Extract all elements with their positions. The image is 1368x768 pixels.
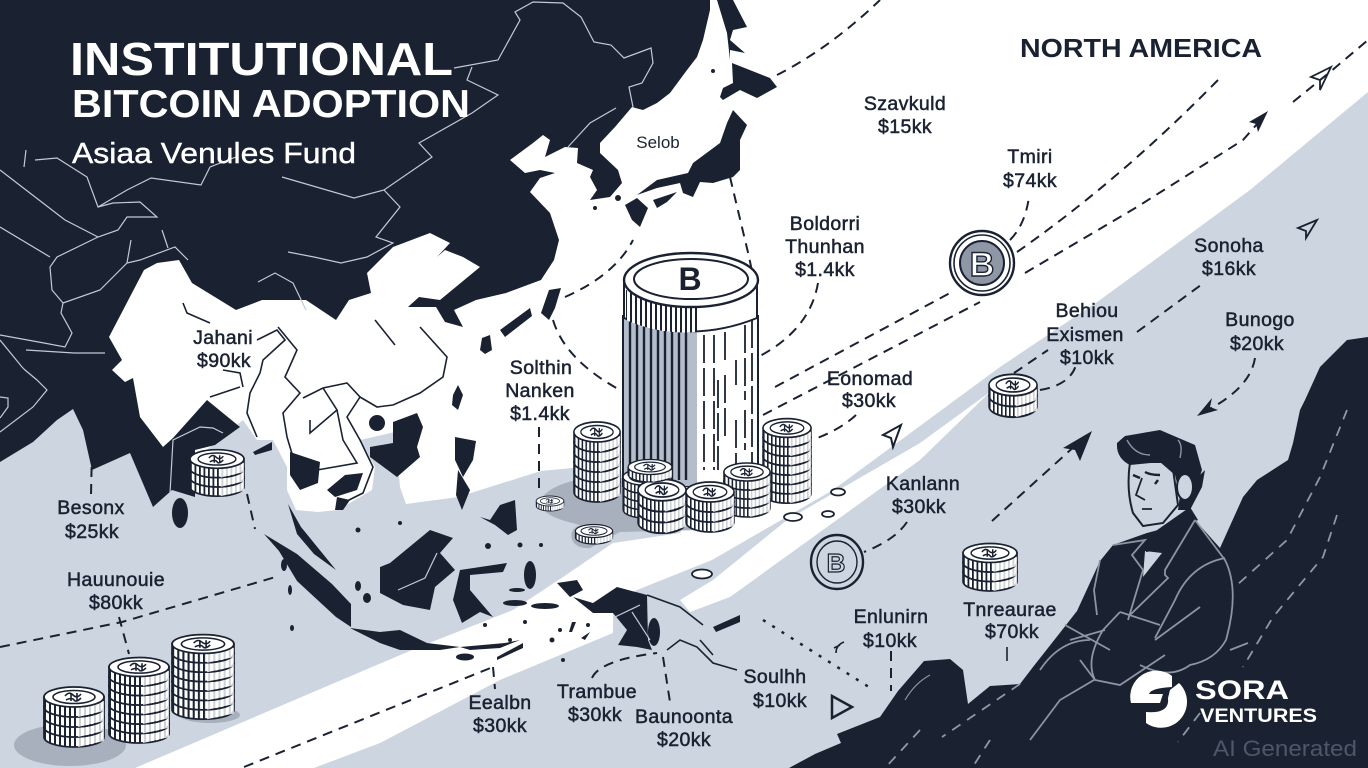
map: Southeast Asia dark lines bbox=[183, 303, 447, 503]
label: Boldorri Thunhan: Thunhan bbox=[785, 236, 865, 258]
column lid: B bbox=[678, 261, 702, 297]
label: Kanlann: $30kk bbox=[892, 496, 946, 518]
label: Jahani: $90kk bbox=[197, 350, 251, 372]
label: Bunogo: Bunogo bbox=[1225, 309, 1295, 331]
logo: Sora Ventures bbox=[1130, 671, 1317, 728]
white shipping band bbox=[680, 392, 990, 612]
label: Eonomad: Eonomad bbox=[827, 368, 913, 390]
neck and collar bbox=[1147, 507, 1198, 545]
label: Enlunirn: Enlunirn bbox=[854, 606, 928, 628]
label: Behiou Exismen: $10kk bbox=[1060, 347, 1114, 369]
label: Tnreaurae bbox=[963, 599, 1057, 643]
label: Behiou Exismen: Exismen bbox=[1046, 324, 1124, 346]
label: Eonomad bbox=[827, 368, 913, 412]
label: Behiou Exismen bbox=[1046, 300, 1124, 369]
logo: Sora Ventures: VENTURES bbox=[1200, 706, 1317, 727]
label: Jahani bbox=[193, 327, 253, 372]
loose coins bbox=[692, 488, 845, 578]
label: Eealbn: Eealbn bbox=[468, 692, 532, 714]
logo wordmark: SORA bbox=[1195, 675, 1289, 705]
label: Eonomad: $30kk bbox=[842, 390, 896, 412]
label: Sonoha: $16kk bbox=[1202, 258, 1256, 280]
label: Soulhh bbox=[743, 666, 807, 712]
face bbox=[1129, 462, 1178, 526]
map: Southeast Asia islands bbox=[172, 385, 740, 662]
map: country borders bbox=[0, 2, 653, 493]
coin stacks beside column bbox=[536, 419, 811, 544]
map: Japan and Sakhalin bbox=[480, 0, 777, 354]
label: Besonx bbox=[57, 497, 125, 543]
label: Boldorri Thunhan bbox=[785, 213, 865, 281]
coin stacks: bottom left bbox=[14, 635, 240, 766]
label: Bunogo bbox=[1225, 309, 1295, 355]
column lid bbox=[624, 253, 758, 332]
label: Trambue bbox=[557, 681, 637, 726]
seated figure and dark hillside bbox=[789, 337, 1368, 768]
label: Selob: Selob bbox=[636, 133, 680, 152]
label: Enlunirn: $10kk bbox=[863, 630, 917, 652]
label: Bunogo: $20kk bbox=[1230, 333, 1284, 355]
hair and ear detail bbox=[1117, 430, 1205, 510]
label: Soulhh: $10kk bbox=[753, 690, 807, 712]
label: Tmiri: Tmiri bbox=[1007, 146, 1053, 168]
label: Szavkuld: $15kk bbox=[878, 116, 932, 138]
arrowheads bbox=[832, 67, 1331, 718]
label: Solthin Nanken: $1.4kk bbox=[510, 403, 570, 425]
label: Tmiri: $74kk bbox=[1003, 170, 1057, 192]
coin stacks: right bbox=[963, 374, 1037, 591]
label: Tnreaurae: $70kk bbox=[985, 621, 1039, 643]
label: Sonoha bbox=[1194, 235, 1264, 280]
label: Eealbn bbox=[468, 692, 532, 737]
heading: North America: NORTH AMERICA bbox=[1020, 33, 1262, 63]
label: Boldorri Thunhan: $1.4kk bbox=[795, 259, 855, 281]
coin stack: Bay of Bengal bbox=[190, 450, 244, 496]
label: Besonx: $25kk bbox=[65, 521, 119, 543]
bow tie bbox=[1146, 533, 1160, 552]
panel: eastern ocean bbox=[314, 92, 1368, 768]
label: Solthin Nanken: Nanken bbox=[505, 380, 575, 402]
label: Kanlann: Kanlann bbox=[886, 473, 960, 495]
label: Solthin Nanken: Solthin bbox=[510, 357, 572, 379]
icon: bitcoin medallion upper bbox=[950, 231, 1014, 295]
label: Baunoonta: $20kk bbox=[657, 729, 711, 751]
label: Trambue: Trambue bbox=[557, 681, 637, 703]
title bbox=[70, 33, 470, 170]
label: Szavkuld bbox=[864, 93, 946, 138]
label: Hauunouie: $80kk bbox=[89, 592, 143, 614]
big bitcoin column bbox=[623, 253, 758, 486]
label: Jahani: Jahani bbox=[193, 327, 253, 349]
map: Papua outline bbox=[398, 553, 737, 670]
label: Besonx: Besonx bbox=[57, 497, 125, 519]
shirt bbox=[1143, 551, 1162, 577]
label: Baunoonta bbox=[635, 706, 733, 751]
icon: bitcoin medallion upper: B bbox=[970, 246, 994, 284]
title line 1: INSTITUTIONAL bbox=[70, 33, 453, 85]
icon: bitcoin medallion lower bbox=[811, 535, 863, 589]
label: Behiou Exismen: Behiou bbox=[1055, 300, 1119, 322]
logo mark bbox=[1130, 671, 1187, 728]
watermark: AI Generated: AI Generated bbox=[1213, 736, 1357, 761]
map: Asian mainland bbox=[0, 0, 710, 507]
icon: bitcoin medallion lower: B bbox=[827, 548, 845, 578]
subtitle: Asiaa Venules Fund bbox=[72, 138, 356, 170]
label: Szavkuld: Szavkuld bbox=[864, 93, 946, 115]
label: Hauunouie: Hauunouie bbox=[67, 569, 165, 591]
label: Boldorri Thunhan: Boldorri bbox=[790, 213, 860, 235]
label: Baunoonta: Baunoonta bbox=[635, 706, 733, 728]
title line 2: BITCOIN ADOPTION bbox=[72, 83, 470, 126]
label: Trambue: $30kk bbox=[568, 704, 622, 726]
column body bbox=[623, 316, 758, 486]
label: Hauunouie bbox=[67, 569, 165, 614]
label: Enlunirn bbox=[854, 606, 928, 652]
suit outline bbox=[1030, 520, 1248, 740]
label: Sonoha: Sonoha bbox=[1194, 235, 1264, 257]
label: Eealbn: $30kk bbox=[473, 715, 527, 737]
coin pile shadow bbox=[540, 478, 720, 548]
panel: western ocean bbox=[0, 400, 700, 768]
label: Soulhh: Soulhh bbox=[743, 666, 807, 688]
label: Tnreaurae: Tnreaurae bbox=[963, 599, 1057, 621]
label: Solthin Nanken bbox=[505, 357, 575, 425]
label: Kanlann bbox=[886, 473, 960, 518]
dashed routes on hillside bbox=[885, 410, 1347, 768]
label: Tmiri bbox=[1003, 146, 1057, 192]
